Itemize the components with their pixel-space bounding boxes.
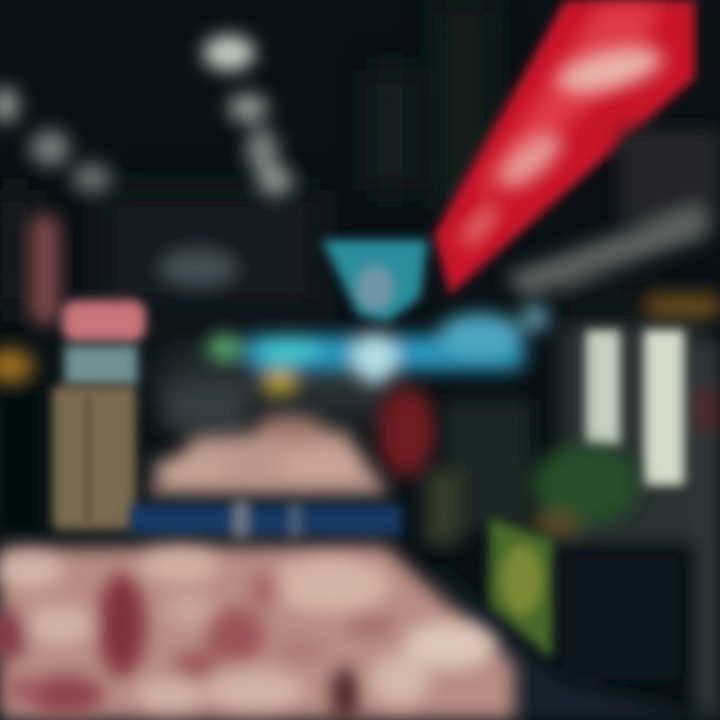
right storefront — [505, 130, 720, 720]
red banner — [434, 0, 695, 295]
dark ceiling tones — [0, 0, 490, 420]
lower meat display — [0, 545, 515, 720]
green plants — [531, 445, 639, 539]
person on left — [0, 215, 146, 530]
ceiling lights — [0, 35, 293, 288]
teal triangle sign — [322, 240, 428, 322]
floor — [430, 560, 720, 720]
cyan light band — [207, 304, 549, 395]
dark planter — [562, 555, 680, 680]
blue band — [130, 500, 402, 538]
white columns — [586, 330, 684, 485]
upper meat table — [145, 415, 390, 495]
green sign — [488, 518, 553, 660]
red figure — [377, 386, 437, 478]
mid dark zone — [165, 385, 530, 545]
